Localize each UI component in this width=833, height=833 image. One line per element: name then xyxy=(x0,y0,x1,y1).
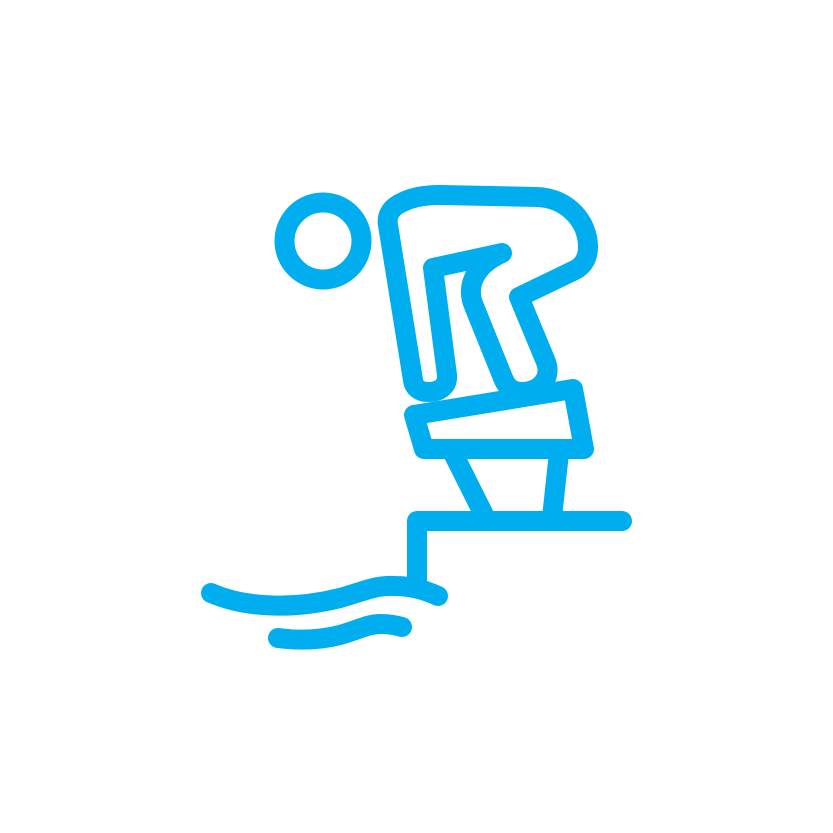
icon: lower wave xyxy=(278,624,402,640)
icon: block legs xyxy=(451,449,559,521)
icon: starting block top xyxy=(414,389,584,449)
icon: upper wave xyxy=(211,586,438,606)
icon: platform xyxy=(417,521,622,585)
icon: swimmer head xyxy=(284,202,362,280)
icon: swimmer body xyxy=(388,195,588,392)
